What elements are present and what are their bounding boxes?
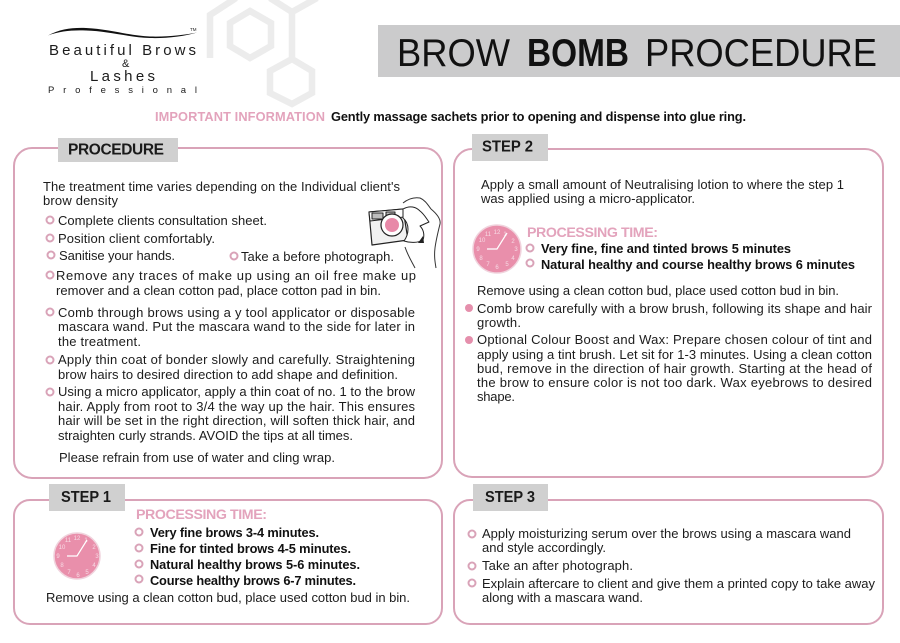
icon: clock: 5	[505, 262, 509, 268]
bullet: colour boost: apply using a tint brush. Let sit for 1-3 minutes. Using a clean cotton	[477, 347, 872, 362]
intro text: was applied using a micro-applicator.	[480, 191, 695, 206]
bullet: remove make up: remover and a clean cotton pad, place cotton pad in bin.	[56, 283, 381, 298]
bullet: photograph: Take a before photograph.	[241, 249, 394, 264]
bullet: natural: Natural healthy and course healthy brows 6 minutes	[541, 257, 855, 272]
bullet: aftercare: Explain aftercare to client and give them a printed copy to take away	[482, 576, 876, 591]
important information line: Gently massage sachets prior to opening and dispense into glue ring.	[331, 109, 746, 124]
intro text	[480, 177, 844, 206]
removal text: Remove using a clean cotton bud, place used cotton bud in bin.	[477, 283, 839, 298]
icon: clock: 9	[476, 247, 480, 253]
icon: camera in hand	[369, 198, 440, 268]
logo line: Professional: Professional	[48, 85, 197, 96]
panel: step 3	[454, 484, 883, 624]
logo	[48, 27, 197, 96]
icon: clock: 6	[495, 265, 499, 271]
bullet: very fine: Very fine, fine and tinted brows 5 minutes	[541, 241, 791, 256]
title banner	[378, 25, 900, 77]
bullet: aftercare: along with a mascara wand.	[482, 590, 643, 605]
bullet: colour boost: bud, remove in the direction of hair growth. Starting at the head of	[477, 361, 872, 376]
bullet: comb brows: the treatment.	[58, 334, 141, 349]
icon: clock	[473, 225, 521, 273]
icon: clock: 10	[479, 238, 486, 244]
logo trademark: TM	[190, 27, 197, 32]
logo line: Beautiful Brows: Beautiful Brows	[49, 42, 196, 59]
heading: step 1	[49, 484, 125, 511]
heading: procedure	[58, 138, 178, 162]
note: Please refrain from use of water and cling wrap.	[59, 450, 335, 465]
icon: clock: 10	[59, 545, 66, 551]
bullet: micro applicator	[46, 384, 416, 443]
bullet: position: Position client comfortably.	[58, 231, 215, 246]
icon: clock	[54, 533, 100, 579]
heading: step 1: STEP 1	[61, 489, 111, 506]
icon: clock: 8	[60, 563, 64, 569]
bullet: micro applicator: hair. Apply from root to 3/4 the way up the hair. This ensures	[58, 399, 416, 414]
bullet: colour boost	[465, 332, 872, 404]
important information line: IMPORTANT INFORMATION	[155, 109, 325, 124]
bullet: remove make up: Remove any traces of make up using an oil free make up	[56, 268, 416, 283]
icon: clock: 1	[503, 232, 507, 238]
title: BROW	[397, 32, 510, 75]
bullet: sanitise: Sanitise your hands.	[59, 248, 175, 263]
icon: clock: 3	[95, 554, 99, 560]
bullet: comb: growth.	[477, 315, 521, 330]
heading: step 2	[472, 134, 548, 161]
icon: clock: 4	[511, 256, 515, 262]
bullet: micro applicator: Using a micro applicator, apply a thin coat of no. 1 to the brow	[58, 384, 416, 399]
icon: clock: 7	[486, 262, 490, 268]
icon: clock: 7	[67, 570, 71, 576]
bullet: fine tinted: Fine for tinted brows 4-5 minutes.	[150, 541, 351, 556]
bullet: aftercare	[468, 576, 876, 605]
intro text: The treatment time varies depending on the Individual client's	[43, 179, 400, 194]
bullet: micro applicator: straighten curly strands. AVOID the tips at all times.	[58, 428, 353, 443]
intro text: brow density	[43, 193, 118, 208]
bullet: comb: Comb brow carefully with a brow brush, following its shape and hair	[477, 301, 873, 316]
bullet: moisturizing serum: Apply moisturizing serum over the brows using a mascara wand	[482, 526, 851, 541]
bullet: comb brows: Comb through brows using a y tool applicator or disposable	[58, 305, 415, 320]
icon: clock: 2	[92, 545, 96, 551]
bullet: moisturizing serum	[468, 526, 851, 555]
intro text: Apply a small amount of Neutralising lotion to where the step 1	[481, 177, 844, 192]
logo ampersand: &	[122, 58, 130, 70]
background hexagon pattern	[210, 0, 317, 104]
icon: clock: 12	[74, 536, 81, 542]
bullet: natural: Natural healthy brows 5-6 minutes.	[150, 557, 360, 572]
bullet: very fine: Very fine brows 3-4 minutes.	[150, 525, 319, 540]
icon: clock: 3	[514, 247, 518, 253]
icon: clock: 11	[65, 538, 72, 544]
bullet: consultation: Complete clients consultation sheet.	[58, 213, 267, 228]
processing time heading: PROCESSING TIME:	[527, 225, 658, 241]
panel: procedure	[14, 138, 442, 478]
icon: clock: 6	[76, 573, 80, 579]
removal text: Remove using a clean cotton bud, place used cotton bud in bin.	[46, 590, 410, 605]
bullet: colour boost: the brow to ensure color is not too dark. Wax eyebrows to desired	[477, 375, 872, 390]
bullet: bonder	[46, 352, 415, 382]
heading: procedure: PROCEDURE	[68, 142, 164, 158]
logo swoosh	[48, 28, 197, 38]
icon: clock: 8	[479, 256, 483, 262]
intro text	[43, 179, 400, 208]
bullet: course: Course healthy brows 6-7 minutes.	[150, 573, 356, 588]
title: PROCEDURE	[645, 32, 877, 75]
bullet: after photograph: Take an after photograph.	[482, 558, 633, 573]
bullet: colour boost: shape.	[477, 389, 515, 404]
processing time heading: PROCESSING TIME:	[136, 507, 267, 523]
bullet: comb brows: mascara wand. Put the mascara wand to the side for later in	[58, 319, 415, 334]
bullet: bonder: Apply thin coat of bonder slowly and carefully. Straightening	[58, 352, 415, 367]
icon: clock: 9	[56, 554, 60, 560]
panel: step 2	[454, 134, 883, 477]
icon: clock: 2	[511, 239, 515, 245]
logo line: Lashes: Lashes	[90, 68, 155, 85]
heading: step 3	[473, 484, 548, 511]
bullet: bonder: brow hairs to desired direction to add shape and definition.	[58, 367, 398, 382]
bullet: comb brows	[46, 305, 415, 349]
bullet: remove make up	[46, 268, 416, 298]
bullet: colour boost: Optional Colour Boost and Wax: Prepare chosen colour of tint and	[477, 332, 872, 347]
title: BOMB	[527, 32, 629, 75]
title	[397, 32, 877, 75]
heading: step 2: STEP 2	[482, 138, 533, 156]
icon: clock: 11	[485, 232, 492, 238]
icon: clock: 5	[85, 570, 89, 576]
icon: clock: 12	[494, 230, 501, 236]
bullet: micro applicator: hair will be set in the right direction, will soften thick hair, and	[58, 413, 415, 428]
icon: clock: 1	[84, 538, 88, 544]
bullet: comb	[465, 301, 873, 330]
heading: step 3: STEP 3	[485, 489, 535, 506]
icon: clock: 4	[92, 563, 96, 569]
panel: step 1	[14, 484, 442, 624]
bullet: moisturizing serum: and style accordingly.	[482, 540, 606, 555]
